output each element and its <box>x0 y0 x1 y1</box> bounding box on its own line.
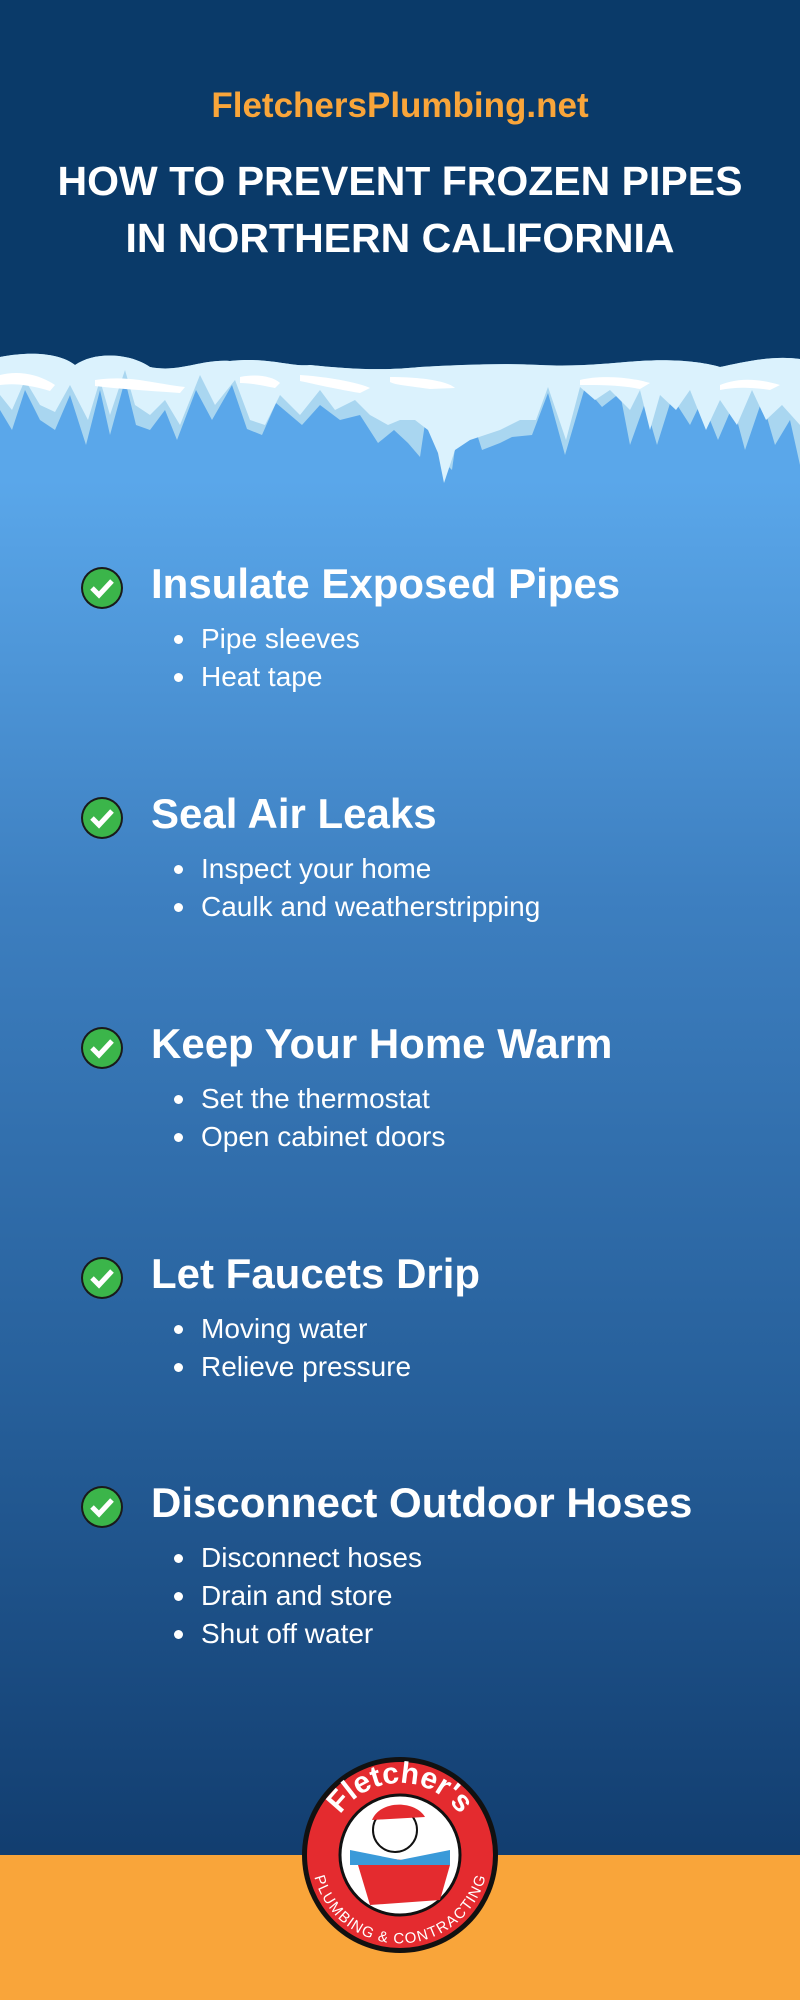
title: HOW TO PREVENT FROZEN PIPES <box>58 158 742 204</box>
site url: FletchersPlumbing.net <box>211 86 589 125</box>
text: Moving water <box>201 1313 368 1344</box>
text: Relieve pressure <box>201 1351 411 1382</box>
text: Inspect your home <box>201 853 431 884</box>
title: IN NORTHERN CALIFORNIA <box>126 215 674 261</box>
icon: check <box>81 1257 123 1299</box>
icon: check <box>81 797 123 839</box>
text: Disconnect Outdoor Hoses <box>151 1479 692 1526</box>
item: hoses <box>81 1479 692 1649</box>
icon: check <box>81 1027 123 1069</box>
icon: check <box>81 567 123 609</box>
icicles <box>0 354 800 483</box>
logo: PLUMBING & CONTRACTING <box>314 1875 484 1944</box>
text: Let Faucets Drip <box>151 1250 480 1297</box>
text: Keep Your Home Warm <box>151 1020 612 1067</box>
text: Drain and store <box>201 1580 392 1611</box>
text: Set the thermostat <box>201 1083 430 1114</box>
item: seal <box>81 790 540 922</box>
text: Caulk and weatherstripping <box>201 891 540 922</box>
item: drip <box>81 1250 480 1382</box>
text: Pipe sleeves <box>201 623 360 654</box>
icon: check <box>81 1486 123 1528</box>
text: Disconnect hoses <box>201 1542 422 1573</box>
logo: Fletcher's <box>326 1761 470 1813</box>
text: Open cabinet doors <box>201 1121 445 1152</box>
logo <box>302 1757 498 1953</box>
title <box>58 158 742 261</box>
item: warm <box>81 1020 612 1152</box>
text: Heat tape <box>201 661 322 692</box>
text: Shut off water <box>201 1618 373 1649</box>
text: Seal Air Leaks <box>151 790 437 837</box>
item: insulate <box>81 560 620 692</box>
text: Insulate Exposed Pipes <box>151 560 620 607</box>
